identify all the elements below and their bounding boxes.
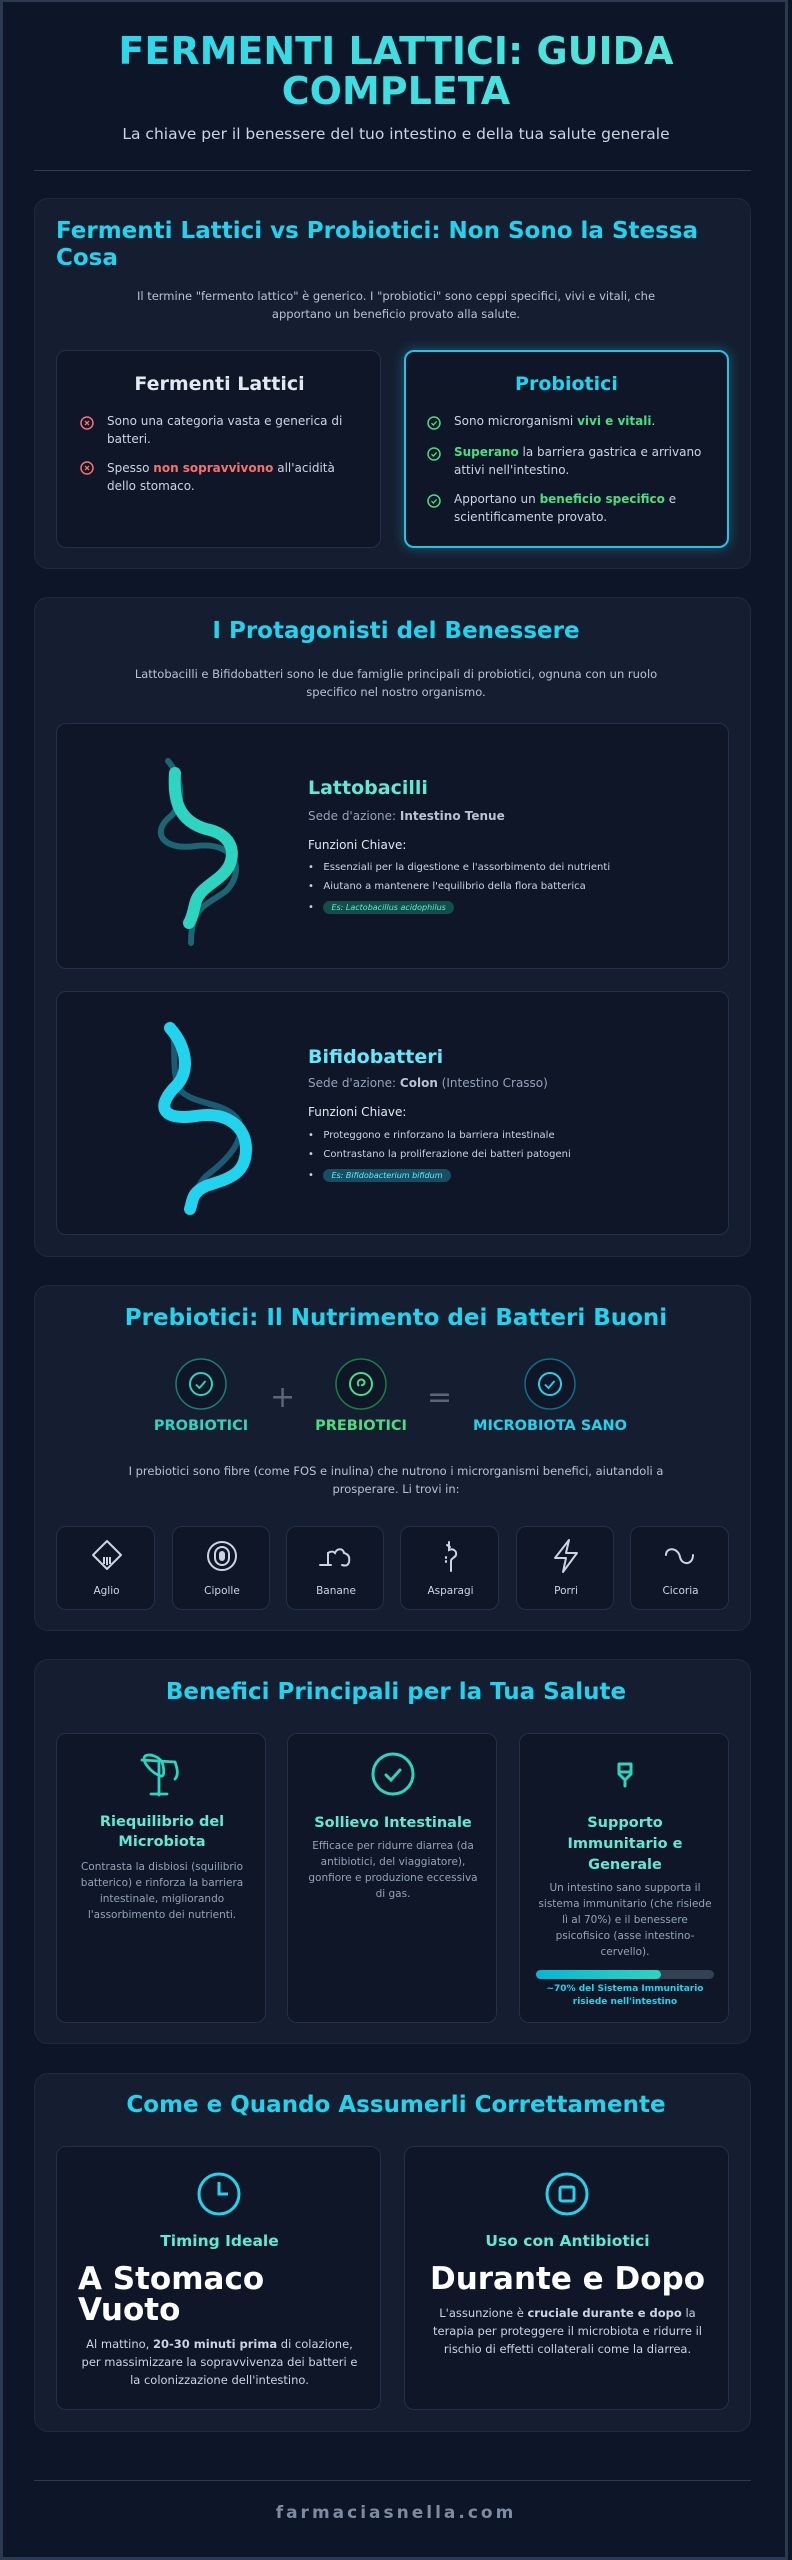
bullets: • Essenziali per la digestione e l'assorbimento dei nutrienti bbox=[308, 862, 610, 873]
icon: x bbox=[80, 461, 94, 475]
card: lattobacilli bbox=[56, 723, 729, 969]
big text: A Stomaco bbox=[78, 2261, 264, 2297]
desc: Al mattino, 20-30 minuti prima di colazione, bbox=[86, 2337, 353, 2351]
desc: cervello). bbox=[601, 1946, 649, 1958]
heading: fermenti vs probiotici: Fermenti Lattici vs Probiotici: Non Sono la Stessa bbox=[56, 218, 698, 244]
panel: benefici bbox=[34, 1659, 751, 2044]
item text bbox=[454, 492, 676, 524]
food: cicoria bbox=[630, 1526, 729, 1610]
item text: scientificamente provato. bbox=[454, 510, 607, 524]
desc: psicofisico (asse intestino- bbox=[556, 1930, 694, 1942]
item text: Sono una categoria vasta e generica di bbox=[107, 414, 342, 428]
icon: clock bbox=[198, 2172, 240, 2216]
icon: lattobacillo bbox=[158, 758, 239, 946]
title: COMPLETA bbox=[282, 69, 510, 113]
desc: per massimizzare la sopravvivenza dei batteri e bbox=[82, 2355, 357, 2369]
desc bbox=[82, 2337, 357, 2387]
card: bifidobatteri bbox=[56, 991, 729, 1235]
icon: stop bbox=[546, 2172, 588, 2216]
bullets: • Aiutano a mantenere l'equilibrio della flora batterica bbox=[308, 881, 586, 892]
heading: fermenti vs probiotici bbox=[56, 218, 698, 271]
icon: shield bbox=[618, 1762, 632, 1788]
desc: batterico) e rinforza la barriera bbox=[81, 1877, 243, 1889]
title bbox=[568, 1815, 682, 1873]
plus: + bbox=[270, 1380, 295, 1415]
labels: PROBIOTICI bbox=[154, 1418, 248, 1434]
intro text: apportano un beneficio provato alla salute. bbox=[272, 307, 520, 321]
panel: protagonisti bbox=[34, 597, 751, 1257]
item text: batteri. bbox=[107, 432, 151, 446]
progress bar bbox=[536, 1970, 714, 1979]
title bbox=[100, 1814, 224, 1850]
desc: terapia per proteggere il microbiota e ridurre il bbox=[433, 2324, 702, 2338]
desc: di gas. bbox=[376, 1888, 410, 1900]
desc bbox=[81, 1861, 243, 1921]
prebiotici text: I prebiotici sono fibre (come FOS e inulina) che nutrono i microrganismi benefici, aiutandoli a bbox=[129, 1464, 663, 1478]
food: cipolle bbox=[172, 1526, 270, 1610]
food: porri: Porri bbox=[554, 1585, 578, 1597]
desc bbox=[308, 1840, 478, 1900]
item text bbox=[107, 414, 342, 446]
panel: fermenti vs probiotici bbox=[34, 198, 751, 569]
intro text: Lattobacilli e Bifidobatteri sono le due famiglie principali di probiotici, ognuna con un ruolo bbox=[135, 667, 657, 681]
equation bbox=[154, 1358, 627, 1434]
intro text: specifico nel nostro organismo. bbox=[306, 685, 486, 699]
card: antibiotici bbox=[404, 2146, 729, 2410]
desc: Contrasta la disbiosi (squilibrio bbox=[81, 1861, 243, 1873]
item text: Spesso non sopravvivono all'acidità bbox=[107, 461, 335, 475]
card: supporto immunitario bbox=[519, 1733, 729, 2023]
item text: Sono microrganismi vivi e vitali. bbox=[454, 414, 655, 428]
bar label: ~70% del Sistema Immunitario bbox=[546, 1984, 703, 1994]
title: Immunitario e bbox=[568, 1836, 682, 1852]
title: FERMENTI LATTICI: GUIDA bbox=[118, 29, 674, 73]
bullets bbox=[308, 1130, 571, 1182]
food: cicoria: Cicoria bbox=[662, 1585, 699, 1597]
subtitle: La chiave per il benessere del tuo intestino e della tua salute generale bbox=[122, 125, 670, 143]
title: Generale bbox=[588, 1857, 662, 1873]
heading: benefici: Benefici Principali per la Tua Salute bbox=[166, 1679, 626, 1705]
desc: L'assunzione è cruciale durante e dopo la bbox=[439, 2306, 696, 2320]
card title: Fermenti Lattici bbox=[134, 373, 305, 395]
title: Microbiota bbox=[118, 1834, 206, 1850]
bar label bbox=[546, 1984, 703, 2007]
item text: Apportano un beneficio specifico e bbox=[454, 492, 676, 506]
equation: PREBIOTICI bbox=[315, 1418, 407, 1434]
sede: Sede d'azione: Intestino Tenue bbox=[308, 809, 505, 823]
desc: Efficace per ridurre diarrea (da bbox=[312, 1840, 474, 1852]
big text: Durante e Dopo bbox=[430, 2261, 705, 2297]
item text: dello stomaco. bbox=[107, 479, 195, 493]
icon: microscope bbox=[140, 1754, 179, 1796]
big text bbox=[78, 2261, 264, 2328]
food: banane: Banane bbox=[316, 1585, 356, 1597]
card title: Probiotici bbox=[515, 373, 618, 395]
item text: Superano la barriera gastrica e arrivano bbox=[454, 445, 701, 459]
card: timing bbox=[56, 2146, 381, 2410]
intro text: Il termine "fermento lattico" è generico. I "probiotici" sono ceppi specifici, vivi e vitali, che bbox=[137, 289, 655, 303]
icon: x bbox=[80, 416, 94, 430]
equals: = bbox=[427, 1380, 452, 1415]
food: banane bbox=[286, 1526, 384, 1610]
item text: attivi nell'intestino. bbox=[454, 463, 569, 477]
food: aglio bbox=[56, 1526, 155, 1610]
desc: Un intestino sano supporta il bbox=[550, 1882, 700, 1894]
desc: rischio di effetti collaterali come la diarrea. bbox=[444, 2342, 691, 2356]
desc bbox=[433, 2306, 702, 2356]
desc: la colonizzazione dell'intestino. bbox=[130, 2373, 309, 2387]
desc: gonfiore e produzione eccessiva bbox=[308, 1872, 478, 1884]
prebiotici text: prosperare. Li trovi in: bbox=[332, 1482, 460, 1496]
heading: assunzione: Come e Quando Assumerli Correttamente bbox=[126, 2092, 666, 2118]
icon: check bbox=[427, 494, 441, 508]
item text bbox=[454, 445, 701, 477]
prebiotici text bbox=[129, 1464, 663, 1496]
icon: check bbox=[427, 447, 441, 461]
title bbox=[0, 31, 792, 111]
bullets: Es: Lactobacillus acidophilus bbox=[331, 903, 446, 912]
card: fermenti lattici bbox=[56, 350, 381, 548]
icon: bifidobatterio bbox=[158, 1022, 252, 1215]
bullets: • Contrastano la proliferazione dei batteri patogeni bbox=[308, 1149, 571, 1160]
bullets: • bbox=[308, 902, 314, 913]
food: asparagi: Asparagi bbox=[427, 1585, 474, 1597]
card: riequilibrio bbox=[56, 1733, 266, 2023]
heading: protagonisti: I Protagonisti del Benessere bbox=[212, 618, 580, 644]
big text: Vuoto bbox=[78, 2292, 180, 2328]
funzioni: Funzioni Chiave: bbox=[308, 838, 406, 852]
desc: intestinale, migliorando bbox=[100, 1893, 224, 1905]
bullets: • Proteggono e rinforzano la barriera intestinale bbox=[308, 1130, 555, 1141]
card: probiotici bbox=[404, 350, 729, 548]
desc bbox=[538, 1882, 712, 1958]
title: Lattobacilli bbox=[308, 777, 428, 799]
bullets bbox=[308, 862, 610, 914]
desc: lì al 70%) e il benessere bbox=[562, 1914, 688, 1926]
card: sollievo bbox=[287, 1733, 497, 2023]
food: cipolle: Cipolle bbox=[204, 1585, 240, 1597]
title: Bifidobatteri bbox=[308, 1046, 443, 1068]
panel: assunzione bbox=[34, 2073, 751, 2432]
heading: fermenti vs probiotici: Cosa bbox=[56, 245, 118, 271]
subtitle: Uso con Antibiotici bbox=[485, 2232, 650, 2250]
panel: prebiotici bbox=[34, 1285, 751, 1631]
desc: antibiotici, del viaggiatore), bbox=[321, 1856, 465, 1868]
funzioni: Funzioni Chiave: bbox=[308, 1105, 406, 1119]
desc: l'assorbimento dei nutrienti. bbox=[88, 1909, 236, 1921]
desc: sistema immunitario (che risiede bbox=[538, 1898, 712, 1910]
bullets: Es: Bifidobacterium bifidum bbox=[331, 1171, 443, 1180]
icon: check bbox=[427, 416, 441, 430]
intro text bbox=[135, 667, 657, 699]
equation: MICROBIOTA SANO bbox=[473, 1418, 627, 1434]
food: aglio: Aglio bbox=[93, 1585, 120, 1597]
icon: probiotici bbox=[175, 1358, 227, 1410]
heading: prebiotici: Prebiotici: Il Nutrimento dei Batteri Buoni bbox=[125, 1305, 667, 1331]
footer: farmaciasnella.com bbox=[276, 2503, 516, 2523]
icon: microbiota bbox=[524, 1358, 576, 1410]
bar label: risiede nell'intestino bbox=[573, 1997, 677, 2007]
intro text bbox=[137, 289, 655, 321]
title: Sollievo Intestinale bbox=[314, 1815, 472, 1831]
icon: check circle bbox=[372, 1752, 414, 1796]
item text bbox=[107, 461, 335, 493]
bullets: • bbox=[308, 1170, 314, 1181]
sede: Sede d'azione: Colon (Intestino Crasso) bbox=[308, 1076, 548, 1090]
subtitle: Timing Ideale bbox=[160, 2232, 279, 2250]
title: Supporto bbox=[587, 1815, 663, 1831]
food: porri bbox=[516, 1526, 614, 1610]
icon: prebiotici bbox=[335, 1358, 387, 1410]
title: Riequilibrio del bbox=[100, 1814, 224, 1830]
food: asparagi bbox=[400, 1526, 499, 1610]
